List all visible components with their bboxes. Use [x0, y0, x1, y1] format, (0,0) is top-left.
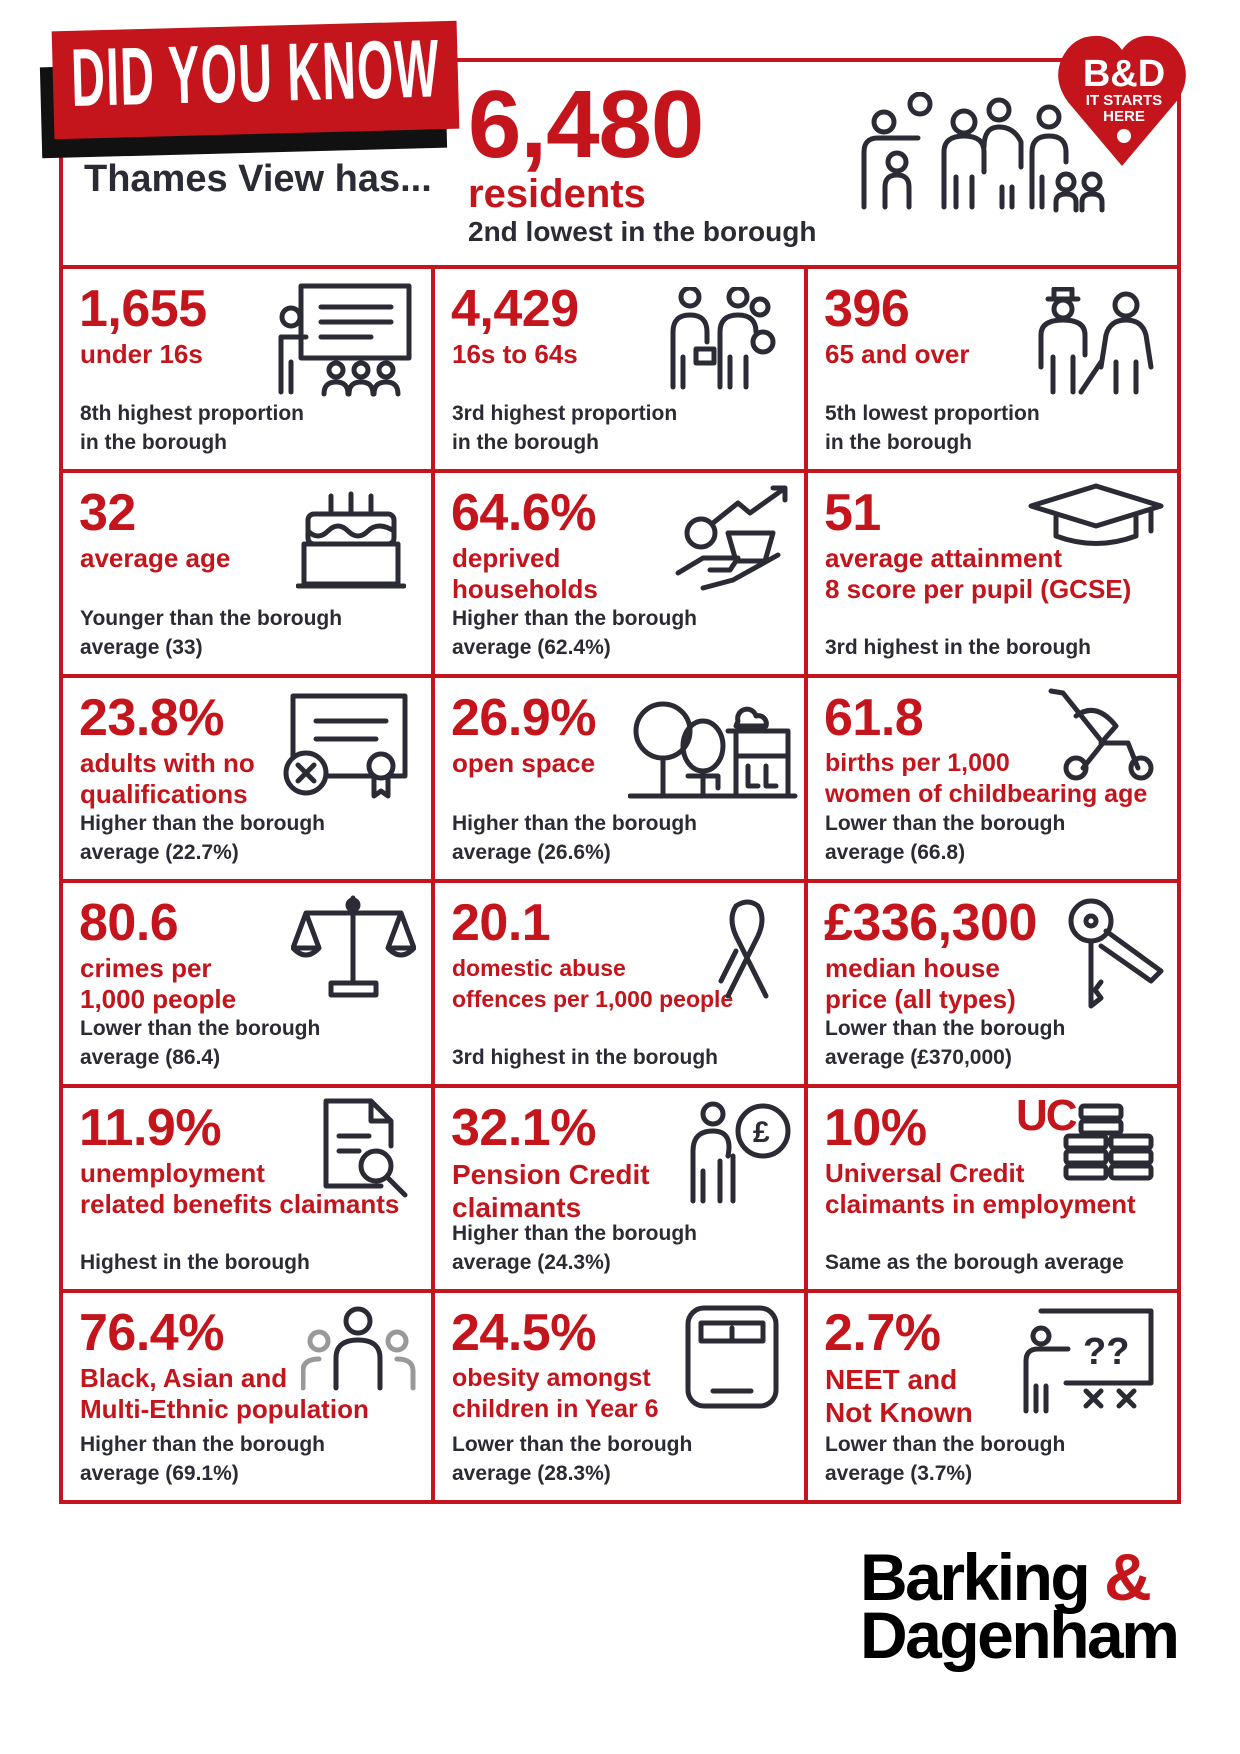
panel: house price: Lower than the borough [825, 1017, 1065, 1040]
panel: births: 61.8 [824, 689, 923, 747]
panel: obesity: Lower than the borough [452, 1433, 692, 1456]
panel: 16s to 64s [451, 280, 776, 454]
panel: ethnicity [79, 1304, 416, 1485]
panel: open space: average (26.6%) [452, 841, 611, 864]
panel: house price: median house [825, 953, 1000, 983]
logo: Barking & Dagenham [860, 1540, 1177, 1672]
panel: pension credit: £ [753, 1116, 770, 1149]
panel: universal credit: Universal Credit [825, 1158, 1024, 1188]
panel: unemployment benefits: Highest in the borough [80, 1251, 310, 1274]
panel: pension credit: average (24.3%) [452, 1251, 611, 1274]
panel: 16s to 64s: in the borough [452, 431, 599, 454]
panel: under 16s: 1,655 [79, 280, 207, 338]
panel: NEET: ?? [1083, 1331, 1129, 1373]
panel: births: women of childbearing age [825, 780, 1147, 808]
panel: NEET: average (3.7%) [825, 1462, 972, 1485]
panel: ethnicity: 76.4% [79, 1304, 224, 1362]
panel: unemployment benefits [79, 1098, 408, 1274]
panel: deprived households: deprived [452, 543, 560, 573]
panel: house price: average (£370,000) [825, 1046, 1012, 1069]
panel: average attainment: 8 score per pupil (GCSE) [825, 574, 1131, 604]
panel: ethnicity: average (69.1%) [80, 1462, 239, 1485]
panel: obesity: obesity amongst [452, 1364, 651, 1392]
headline stat: residents [468, 71, 816, 247]
panel: house price [824, 894, 1164, 1069]
panel: open space: open space [452, 748, 595, 778]
panel: no qualifications: 23.8% [79, 689, 224, 747]
panel: crimes: 80.6 [79, 894, 178, 952]
panel: obesity: children in Year 6 [452, 1395, 659, 1423]
panel: pension credit: Pension Credit [452, 1159, 650, 1190]
panel: unemployment benefits: unemployment [80, 1158, 265, 1188]
panel: pension credit [451, 1099, 790, 1274]
panel: ethnicity: Multi-Ethnic population [80, 1394, 369, 1424]
title banner: did you know: DID YOU KNOW [70, 23, 441, 124]
headline stat: residents: 6,480 [468, 71, 703, 178]
panel: births: births per 1,000 [825, 749, 1010, 777]
panel: domestic abuse: offences per 1,000 people [452, 986, 733, 1012]
panel: births: Lower than the borough [825, 812, 1065, 835]
panel: average attainment: 51 [824, 484, 881, 542]
panel: open space: Higher than the borough [452, 812, 697, 835]
intro text: Thames View has... [84, 158, 432, 200]
headline stat: residents: 2nd lowest in the borough [468, 216, 816, 247]
panel: deprived households: households [452, 574, 598, 604]
panel: average attainment: 3rd highest in the borough [825, 636, 1091, 659]
panel: under 16s [79, 280, 412, 454]
panel: average age [79, 484, 406, 659]
panel: obesity: average (28.3%) [452, 1462, 611, 1485]
panel: no qualifications: adults with no [80, 748, 255, 778]
panel: under 16s: in the borough [80, 431, 227, 454]
panel: average attainment: average attainment [825, 543, 1062, 573]
title banner: did you know [40, 20, 460, 158]
panel: NEET: NEET and [825, 1364, 957, 1395]
logo: B&D heart [1058, 36, 1186, 166]
panel: universal credit: Same as the borough average [825, 1251, 1124, 1274]
panel: 65 and over: 396 [824, 280, 909, 338]
panel: average attainment [824, 484, 1164, 659]
panel: universal credit [824, 1091, 1154, 1274]
panel: no qualifications: qualifications [80, 779, 248, 809]
panel: deprived households: 64.6% [451, 484, 596, 542]
panel: universal credit: 10% [824, 1099, 927, 1157]
panel: 65 and over: 65 and over [825, 339, 970, 369]
panel: pension credit: Higher than the borough [452, 1222, 697, 1245]
panel: average age: Younger than the borough [80, 607, 342, 630]
panel: crimes: average (86.4) [80, 1046, 220, 1069]
panel: births [824, 688, 1154, 864]
panel: no qualifications [79, 689, 408, 864]
panel: no qualifications: average (22.7%) [80, 841, 239, 864]
panel: 16s to 64s: 16s to 64s [452, 339, 578, 369]
icon: family group [862, 92, 1104, 212]
logo: B&D heart: IT STARTS [1086, 92, 1162, 109]
panel: 65 and over [824, 280, 1154, 454]
panel: domestic abuse: 20.1 [451, 894, 550, 952]
panel: house price: £336,300 [824, 894, 1037, 952]
panel: average age: average age [80, 543, 230, 573]
panel: obesity: 24.5% [451, 1304, 596, 1362]
panel: under 16s: 8th highest proportion [80, 402, 304, 425]
panel: births: average (66.8) [825, 841, 965, 864]
panel: no qualifications: Higher than the borough [80, 812, 325, 835]
panel: 65 and over: 5th lowest proportion [825, 402, 1040, 425]
logo: B&D heart: B&D [1083, 53, 1165, 95]
panel: 16s to 64s: 4,429 [451, 280, 579, 338]
panel: NEET: Lower than the borough [825, 1433, 1065, 1456]
panel: pension credit: claimants [452, 1192, 581, 1223]
panel: crimes: 1,000 people [80, 984, 236, 1014]
panel: 65 and over: in the borough [825, 431, 972, 454]
panel: open space [451, 689, 798, 864]
panel: ethnicity: Higher than the borough [80, 1433, 325, 1456]
panel: open space: 26.9% [451, 689, 596, 747]
panel: deprived households: average (62.4%) [452, 636, 611, 659]
panel: pension credit: 32.1% [451, 1099, 596, 1157]
panel: domestic abuse: domestic abuse [452, 955, 626, 981]
panel: obesity [451, 1304, 778, 1485]
panel: NEET: Not Known [825, 1397, 973, 1428]
panel: domestic abuse: 3rd highest in the borough [452, 1046, 718, 1069]
logo: Barking & Dagenham: Dagenham [860, 1598, 1177, 1672]
panel: universal credit: UC [1016, 1091, 1076, 1140]
panel: crimes: crimes per [80, 953, 212, 983]
panel: average age: 32 [79, 484, 136, 542]
panel: ethnicity: Black, Asian and [80, 1363, 287, 1393]
panel: house price: price (all types) [825, 984, 1016, 1014]
panel: unemployment benefits: related benefits claimants [80, 1189, 399, 1219]
panel: deprived households: Higher than the borough [452, 607, 697, 630]
panel: NEET [824, 1304, 1154, 1485]
panel: universal credit: claimants in employment [825, 1189, 1136, 1219]
panel: crimes: Lower than the borough [80, 1017, 320, 1040]
panel: average age: average (33) [80, 636, 203, 659]
logo: Barking & Dagenham: Barking & [860, 1540, 1149, 1614]
logo: B&D heart: HERE [1103, 108, 1145, 125]
panel: unemployment benefits: 11.9% [79, 1099, 221, 1157]
panel: under 16s: under 16s [80, 339, 203, 369]
panel: domestic abuse [451, 894, 768, 1069]
panel: 16s to 64s: 3rd highest proportion [452, 402, 677, 425]
headline stat: residents: residents [468, 172, 646, 216]
panel: deprived households [451, 484, 788, 659]
panel: crimes [79, 894, 416, 1069]
panel: NEET: 2.7% [824, 1304, 941, 1362]
